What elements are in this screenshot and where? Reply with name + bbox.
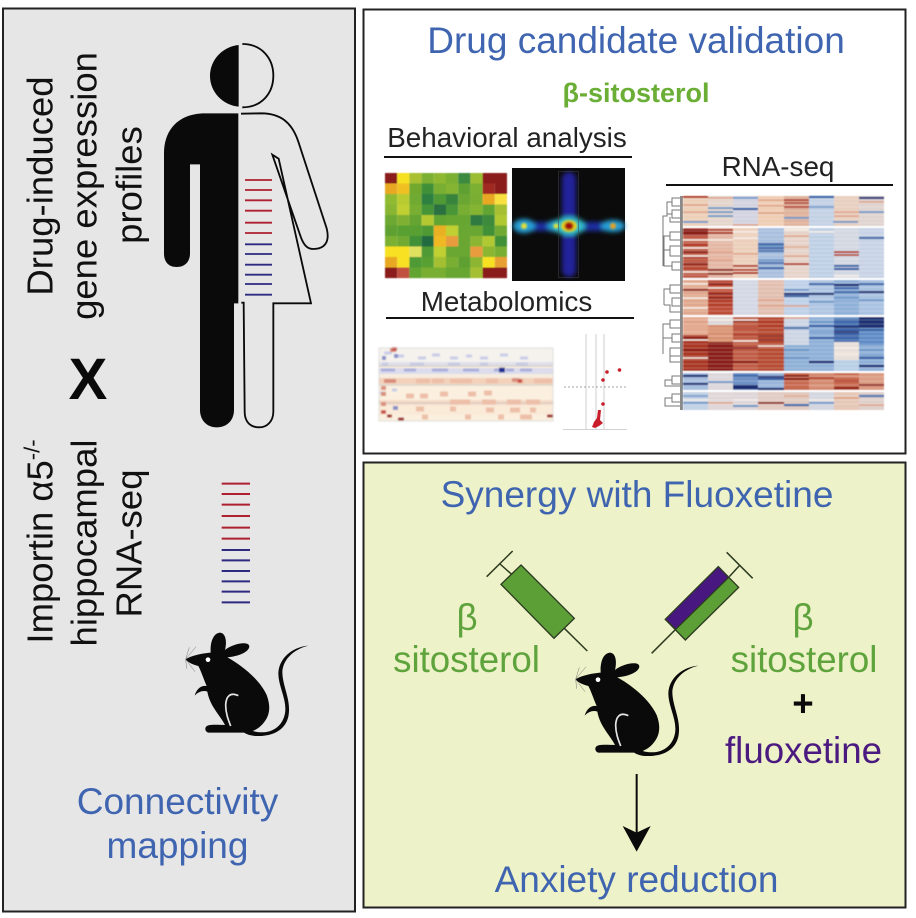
label: beta-sitosterol left [393,597,540,680]
stripes: cream [683,228,859,400]
subheading: beta-sitosterol: β-sitosterol [562,78,710,108]
stripes: mid blue [683,198,884,406]
icon: mouse [186,633,308,736]
heading: synergy with fluoxetine: Synergy with Fluoxetine [441,474,833,515]
fine row texture [683,199,884,404]
icon: syringe combination [652,552,753,653]
heading: connectivity mapping: mapping [107,825,248,866]
label: beta-sitosterol left: β [456,597,478,638]
heading: anxiety reduction: Anxiety reduction [495,859,778,900]
chart: metabolomics heatmap [379,348,553,421]
heading: connectivity mapping [77,781,279,866]
heading: behavioral analysis: Behavioral analysis [387,122,627,153]
panel: connectivity mapping [3,8,355,912]
heading: metabolomics: Metabolomics [421,286,592,317]
stripes: dark red [683,230,884,403]
label: beta-sitosterol plus fluoxetine: + [792,683,814,724]
label: beta-sitosterol left: sitosterol [393,639,540,680]
dendrogram [663,196,683,410]
heading: drug candidate validation: Drug candidate validation [427,20,845,61]
chart: green open field heatmap [385,178,507,273]
icon: half male half female figure [164,44,328,427]
rotated label: drug-induced gene expression profiles: Drug-induced [20,76,60,296]
rotated label: importin hippocampal RNA-seq [20,439,150,646]
rotated label: importin hippocampal RNA-seq: RNA-seq [109,469,150,618]
label: beta-sitosterol plus fluoxetine: β [792,597,814,638]
label: beta-sitosterol plus fluoxetine [725,597,882,771]
stripes: blue [683,197,884,405]
chart: RNA-seq heatmap [663,196,884,410]
stripes: salmon [683,198,884,405]
chart: plus maze density map [512,168,625,281]
heading: connectivity mapping: Connectivity [77,781,279,822]
heading: RNA-seq: RNA-seq [722,151,834,182]
cluster blocks [683,196,884,410]
cells [683,196,884,410]
rotated label: importin hippocampal RNA-seq: Importin α5 [20,460,60,644]
multiplication sign: X [69,347,108,412]
stripes: navy [683,198,884,389]
label: beta-sitosterol plus fluoxetine: fluoxetine [725,730,882,771]
panel: synergy with fluoxetine [364,462,906,908]
rotated label: importin hippocampal RNA-seq: hippocampal [64,440,105,646]
icon: syringe beta-sitosterol [487,551,587,651]
chart: volcano plot [563,334,628,430]
panel: drug candidate validation [364,10,906,454]
gene signature lines [222,484,250,602]
arrow [623,774,651,852]
icon: mouse [576,653,698,756]
stripes: red [683,197,859,381]
label: beta-sitosterol plus fluoxetine: sitosterol [731,639,877,680]
rotated label: drug-induced gene expression profiles: gene expression [64,52,105,320]
rotated label: importin hippocampal RNA-seq: -/- [20,439,44,460]
rotated label: drug-induced gene expression profiles [20,52,150,320]
rotated label: drug-induced gene expression profiles: profiles [109,126,150,244]
